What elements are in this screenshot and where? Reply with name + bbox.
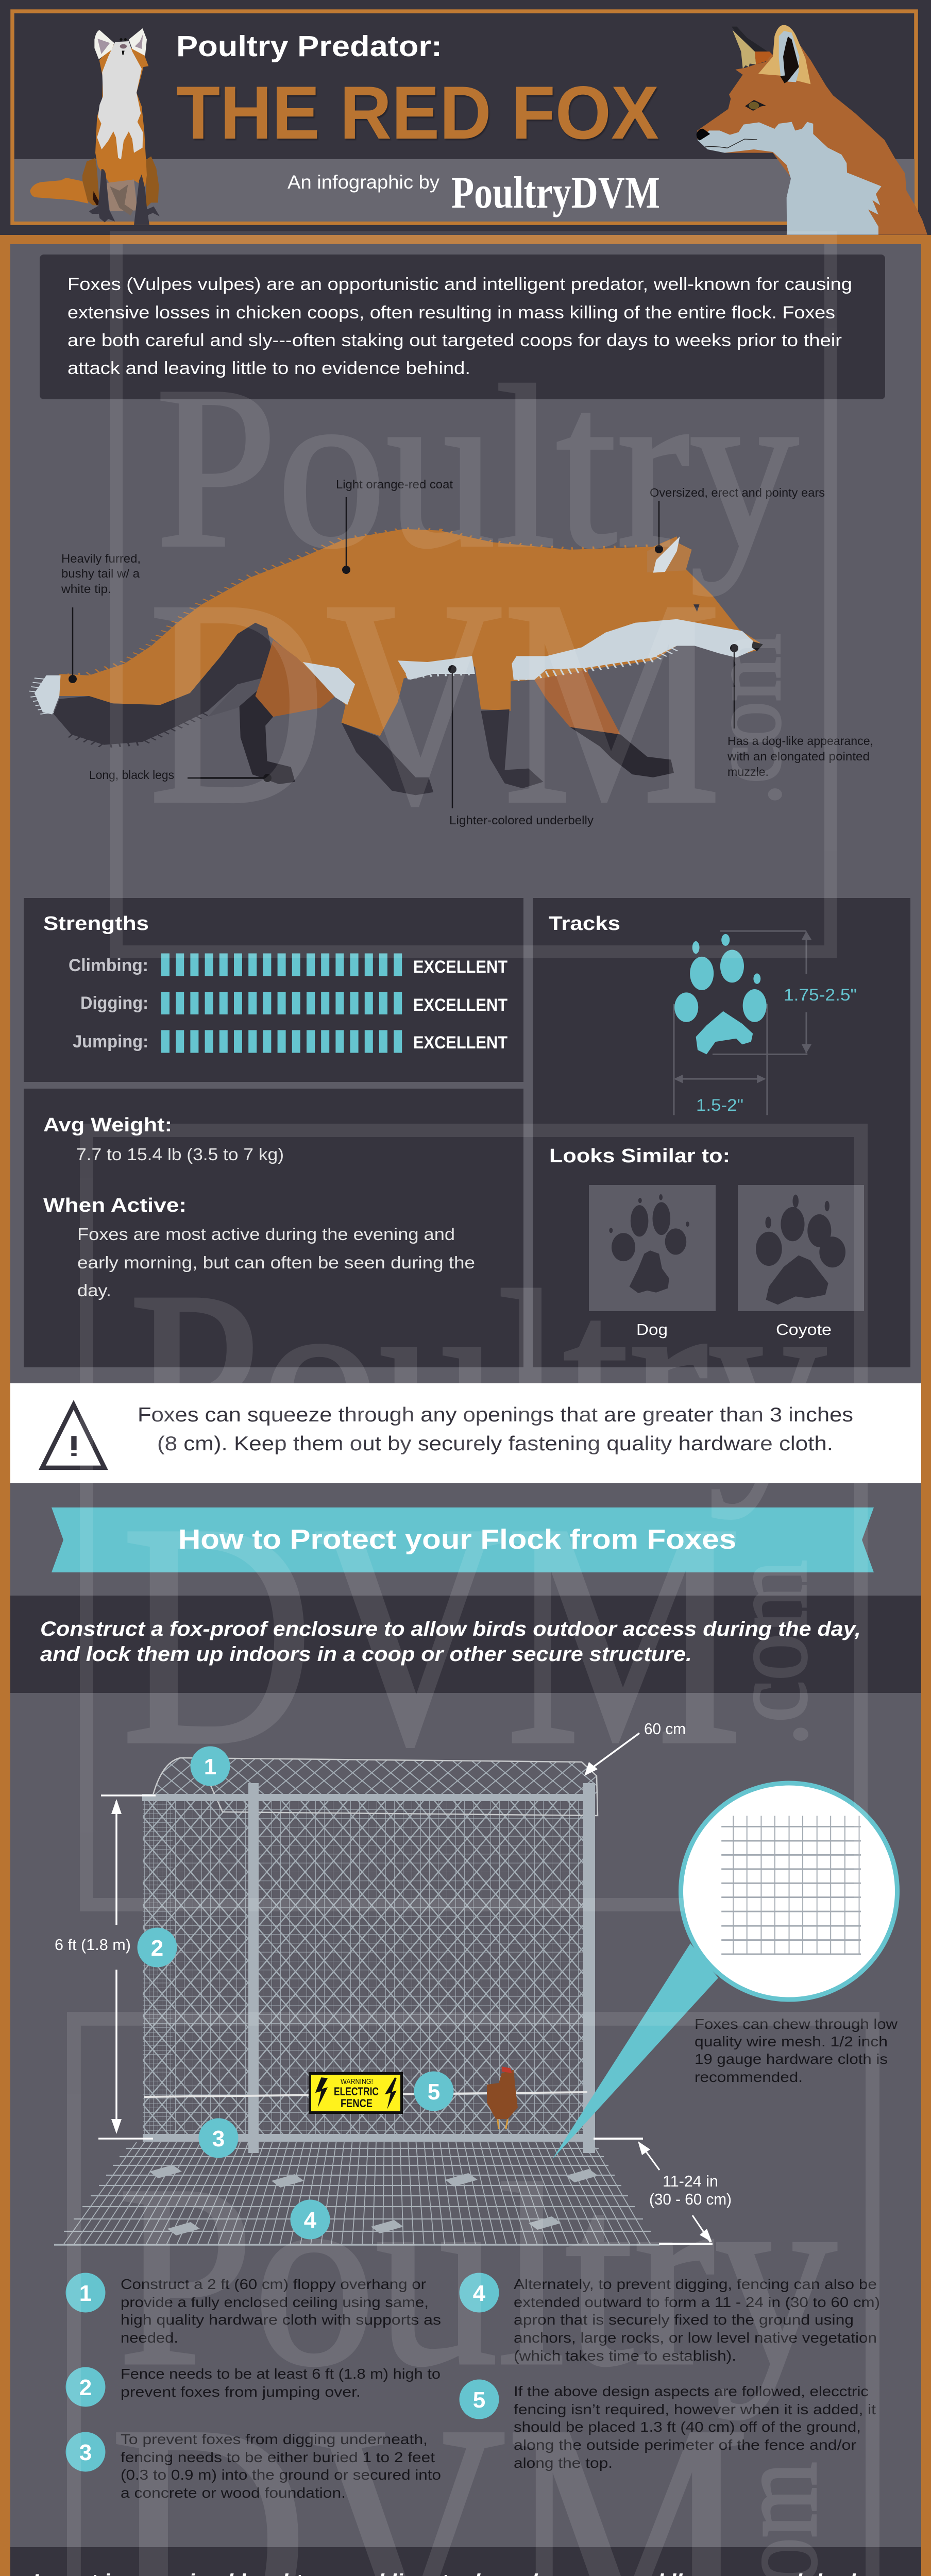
heading: avg weight: Avg Weight: xyxy=(43,1114,172,1136)
dimension: overhang 60 cm: 60 cm xyxy=(644,1720,686,1738)
watermark: frame one xyxy=(116,238,831,952)
rating: digging: EXCELLENT xyxy=(413,995,507,1015)
label: dog: Dog xyxy=(636,1320,668,1338)
step 3: fencing needs to be either buried 1 to 2 feet xyxy=(121,2449,435,2465)
step 2 xyxy=(66,2366,441,2407)
diagram: fence xyxy=(54,1720,898,2245)
watermark: frame three xyxy=(74,2019,873,2576)
rating: digging xyxy=(80,993,507,1015)
marker 5 xyxy=(414,2071,453,2111)
heading: when active: When Active: xyxy=(43,1195,187,1216)
panel: warning banner: (8 cm). Keep them out by securely fastening quality hardware cloth. xyxy=(157,1433,833,1455)
dimension: fence height: 6 ft (1.8 m) xyxy=(55,1936,131,1954)
marker 4 xyxy=(291,2200,330,2239)
strip: enclosure advice xyxy=(10,1596,921,1693)
intro text: attack and leaving little to no evidence behind. xyxy=(67,359,470,378)
heading: tracks: Tracks xyxy=(549,913,620,935)
step 5 xyxy=(460,2379,876,2471)
icon: standing fox xyxy=(30,28,160,225)
callout: tail xyxy=(61,552,141,683)
step 5: along the top. xyxy=(514,2455,613,2471)
activity text: day. xyxy=(77,1281,111,1300)
mesh caption: Foxes can chew through low xyxy=(695,2016,898,2032)
callout: underbelly: Lighter-colored underbelly xyxy=(449,814,594,827)
watermark: frame two: Poultry xyxy=(129,1240,826,1519)
strip: enclosure advice: Construct a fox-proof enclosure to allow birds outdoor access during the day, xyxy=(40,1618,861,1640)
step 4: 4 xyxy=(473,2281,486,2306)
rating: climbing xyxy=(69,956,507,977)
mesh caption: quality wire mesh. 1/2 inch xyxy=(695,2033,888,2049)
callout: tail: Heavily furred, xyxy=(61,552,141,565)
callout: legs: Long, black legs xyxy=(89,768,174,782)
warning text: Foxes can squeeze through any openings that are greater than 3 inches xyxy=(138,1404,853,1426)
intro text: are both careful and sly---often staking out targeted coops for days to weeks prior to their xyxy=(67,331,842,350)
callout: tail: white tip. xyxy=(61,582,111,596)
strip: enclosure advice: and lock them up indoors in a coop or other secure structure. xyxy=(40,1643,692,1666)
callout: muzzle xyxy=(727,644,873,778)
weight value: 7.7 to 15.4 lb (3.5 to 7 kg) xyxy=(76,1145,284,1164)
step 4: Alternately, to prevent digging, fencing can also be xyxy=(514,2276,877,2292)
sign: electric fence xyxy=(310,2073,402,2112)
panel: header xyxy=(0,0,931,235)
logo: PoultryDVM: PoultryDVM xyxy=(451,168,660,218)
step 1: high quality hardware cloth with supports as xyxy=(121,2312,441,2328)
mesh caption: recommended. xyxy=(695,2069,803,2085)
step 1 xyxy=(66,2273,441,2346)
rating: climbing: Climbing: xyxy=(69,956,148,975)
panel: warning banner xyxy=(10,1383,921,1483)
icon: dog track xyxy=(589,1185,716,1311)
step 2: Fence needs to be at least 6 ft (1.8 m) high to xyxy=(121,2366,441,2382)
label: coyote: Coyote xyxy=(776,1320,832,1338)
dimension: apron xyxy=(594,2139,732,2244)
intro text: extensive losses in chicken coops, often resulting in mass killing of the entire flock. Foxes xyxy=(67,303,835,323)
step 4 xyxy=(460,2273,880,2364)
callout: coat: Light orange-red coat xyxy=(336,478,453,491)
activity text xyxy=(77,1225,475,1300)
callout: mesh magnifier xyxy=(552,1783,898,2159)
marker 5: 5 xyxy=(428,2079,440,2105)
panel: weight and activity xyxy=(24,1089,523,1367)
marker 4: 4 xyxy=(304,2208,317,2233)
icon: warning triangle xyxy=(39,1400,108,1470)
step 5: fencing isn’t required, however when it is added, it xyxy=(514,2401,876,2417)
callout: underbelly xyxy=(448,665,594,827)
dimension: width: 1.5-2" xyxy=(696,1096,743,1114)
watermark: frame two: .com xyxy=(709,1560,830,1746)
step 1: Construct a 2 ft (60 cm) floppy overhang or xyxy=(121,2276,426,2292)
watermark: frame one: Poultry xyxy=(156,339,799,596)
dimension: overhang 60 cm xyxy=(584,1720,686,1776)
dimension: fence height xyxy=(55,1795,156,2139)
hardware cloth grid xyxy=(721,1816,861,1955)
dimension: apron: 11-24 in xyxy=(663,2172,718,2190)
panel: intro xyxy=(40,255,885,399)
activity text: early morning, but can often be seen during the xyxy=(77,1253,475,1272)
watermark: frame two xyxy=(87,1130,861,1905)
marker 3 xyxy=(199,2119,238,2158)
panel: strengths xyxy=(24,898,523,1082)
icon: chicken xyxy=(487,2066,518,2129)
watermark: frame one: DVM xyxy=(148,540,721,865)
heading: how to protect: How to Protect your Flock from Foxes xyxy=(178,1524,736,1555)
watermark: frame three: Poultry xyxy=(117,2132,837,2419)
rating: jumping xyxy=(73,1032,507,1053)
heading: looks similar: Looks Similar to: xyxy=(549,1145,730,1167)
step 3: (0.3 to 0.9 m) into the ground or secured into xyxy=(121,2467,441,2483)
heading: strengths: Strengths xyxy=(43,913,149,935)
step 4: anchors, large rocks, or low level native vegetation xyxy=(514,2330,877,2346)
rating: digging: Digging: xyxy=(80,993,148,1013)
callout: muzzle: muzzle. xyxy=(727,765,769,778)
step 5: should be placed 1.3 ft (40 cm) off of the ground, xyxy=(514,2419,861,2435)
step 4: (which takes time to establish). xyxy=(514,2348,736,2364)
marker 2: 2 xyxy=(151,1936,163,1961)
marker 2 xyxy=(137,1928,177,1967)
steps list xyxy=(66,2273,880,2501)
step 4: extended outward to form a 11 - 24 in (30 to 60 cm) xyxy=(514,2294,880,2310)
fence mesh xyxy=(143,1801,586,2134)
rating: climbing: EXCELLENT xyxy=(413,957,507,977)
dimension: apron: (30 - 60 cm) xyxy=(649,2190,732,2208)
heading: poultry predator: Poultry Predator: xyxy=(176,30,442,63)
step 1: provide a fully enclosed ceiling using same, xyxy=(121,2294,429,2310)
icon: coyote track xyxy=(738,1185,864,1311)
apron mesh on the ground xyxy=(54,2142,659,2245)
intro text xyxy=(67,275,852,378)
orange bar xyxy=(0,235,931,244)
step 3: To prevent foxes from digging underneath, xyxy=(121,2431,428,2447)
icon: fox portrait xyxy=(697,25,927,235)
marker 3: 3 xyxy=(212,2126,225,2151)
mesh caption xyxy=(695,2016,898,2085)
watermark: frame one: .com xyxy=(690,634,802,805)
fox anatomy diagram xyxy=(35,478,873,827)
mesh caption: 19 gauge hardware cloth is xyxy=(695,2051,888,2067)
activity text: Foxes are most active during the evening and xyxy=(77,1225,455,1244)
step 1: needed. xyxy=(121,2330,178,2346)
step 3: 3 xyxy=(79,2440,92,2465)
marker 1: 1 xyxy=(204,1754,216,1780)
marker 1 xyxy=(191,1747,230,1786)
strip: guard animal advice xyxy=(10,2547,921,2576)
intro text: Foxes (Vulpes vulpes) are an opportunistic and intelligent predator, well-known for causing xyxy=(67,275,852,294)
callout: coat xyxy=(336,478,453,574)
callout: muzzle: Has a dog-like appearance, xyxy=(727,734,873,748)
step 4: apron that is securely fixed to the ground using xyxy=(514,2312,854,2328)
anchors xyxy=(149,2165,598,2235)
callout: muzzle: with an elongated pointed xyxy=(727,750,870,763)
icon: red fox side view xyxy=(35,529,763,795)
step 5: along the outside perimeter of the fence and/or xyxy=(514,2437,856,2453)
sign: electric fence: FENCE xyxy=(341,2097,373,2110)
callout: ears xyxy=(650,486,825,553)
fence posts and rails xyxy=(142,1783,595,2153)
watermark: frame two: DVM xyxy=(121,1458,742,1810)
byline: An infographic by xyxy=(287,172,440,193)
panel: tracks and look-alikes xyxy=(533,898,910,1367)
electric wire xyxy=(144,2092,587,2097)
callout: ears: Oversized, erect and pointy ears xyxy=(650,486,825,499)
callout: tail: bushy tail w/ a xyxy=(61,567,140,580)
rating: jumping: EXCELLENT xyxy=(413,1033,507,1053)
step 3 xyxy=(66,2431,441,2501)
overhang xyxy=(153,1758,598,1816)
callout: legs xyxy=(89,768,272,782)
rating: jumping: Jumping: xyxy=(73,1032,148,1052)
section banner xyxy=(52,1507,874,1572)
step 2: 2 xyxy=(79,2375,92,2400)
icon: fox paw print with dimensions xyxy=(674,931,811,1115)
step 1: 1 xyxy=(79,2281,92,2306)
step 5: If the above design aspects are followed, elecctric xyxy=(514,2383,869,2399)
step 2: prevent foxes from jumping over. xyxy=(121,2384,361,2400)
step 5: 5 xyxy=(473,2387,485,2413)
sign: electric fence: WARNING! xyxy=(341,2077,373,2086)
sign: electric fence: ELECTRIC xyxy=(334,2085,379,2098)
dimension: length: 1.75-2.5" xyxy=(784,986,857,1004)
step 3: a concrete or wood foundation. xyxy=(121,2485,346,2501)
title: the red fox: THE RED FOX xyxy=(176,71,659,155)
